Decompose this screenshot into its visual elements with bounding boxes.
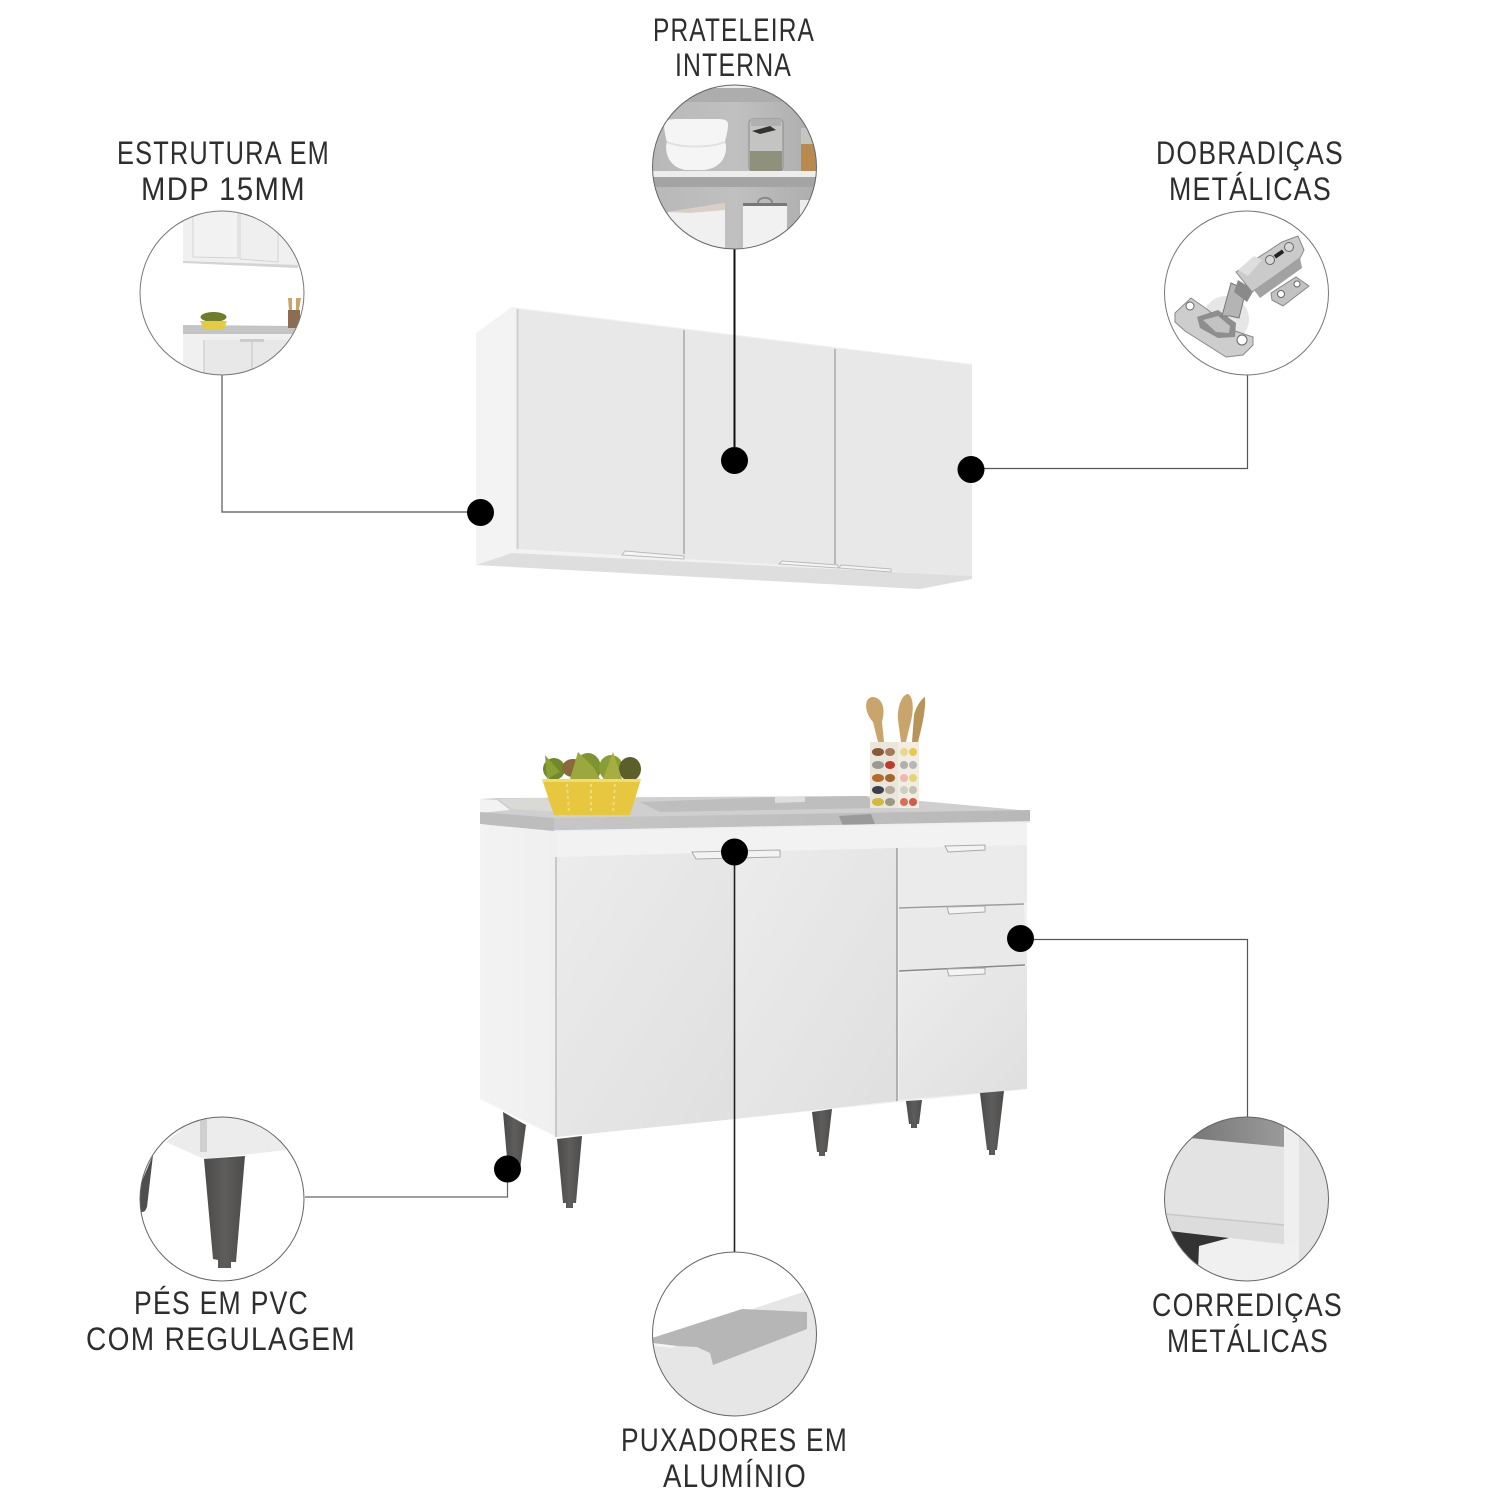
callout: corredicas metalicas (1164, 1116, 1329, 1282)
second jar (801, 128, 812, 144)
connector: puxadores (734, 852, 736, 1252)
label: prateleira interna: INTERNA (675, 47, 792, 83)
label: corredicas metalicas (1152, 1287, 1343, 1359)
callout: pes em PVC (139, 1116, 305, 1281)
door and drawer handles (692, 845, 985, 976)
arm (1222, 283, 1246, 318)
label: prateleira interna: PRATELEIRA (653, 12, 815, 48)
legs (503, 1091, 1004, 1208)
label: dobradicas metalicas: DOBRADIÇAS (1156, 135, 1344, 171)
marker dots (467, 447, 1034, 1182)
label: estrutura em MDP 15mm: MDP 15MM (141, 171, 306, 207)
base cabinet (480, 796, 1030, 1208)
wall cabinet (476, 307, 972, 589)
label: prateleira interna (653, 12, 815, 83)
label: puxadores em aluminio: PUXADORES EM (621, 1422, 848, 1458)
countertop (480, 796, 1030, 831)
connector: estrutura (222, 375, 480, 512)
callout: prateleira interna (652, 85, 821, 250)
wooden spoons (866, 694, 925, 742)
fruit bowl (542, 752, 641, 815)
shelf (652, 171, 817, 177)
cup leaf pattern (872, 748, 917, 806)
utensil holder (866, 694, 925, 808)
cabinet side shading (480, 825, 557, 1137)
cabinet handles (622, 551, 891, 572)
label: puxadores em aluminio (621, 1422, 848, 1494)
callout: estrutura em MDP (139, 205, 305, 380)
side bracket (1271, 277, 1309, 306)
base doors (556, 848, 897, 1137)
label: estrutura em MDP 15mm (117, 135, 330, 207)
label: pes em PVC com regulagem: COM REGULAGEM (86, 1321, 356, 1357)
connector: prateleira (734, 249, 736, 460)
door gaps (518, 309, 835, 564)
label: dobradicas metalicas: METÁLICAS (1169, 171, 1332, 207)
label: corredicas metalicas: METÁLICAS (1167, 1323, 1329, 1359)
callout: puxadores em aluminio (650, 1252, 820, 1420)
connector: dobradicas (971, 375, 1248, 468)
mount plate (1175, 298, 1253, 357)
connector: corredicas (1020, 940, 1248, 1117)
label: puxadores em aluminio: ALUMÍNIO (663, 1458, 807, 1494)
drawers (899, 845, 1027, 1100)
label: corredicas metalicas: CORREDIÇAS (1152, 1287, 1343, 1323)
connector: pes (305, 1169, 508, 1197)
label: dobradicas metalicas (1156, 135, 1344, 207)
jar (749, 119, 783, 171)
bowls (664, 119, 728, 170)
white boxes (668, 203, 725, 250)
label: pes em PVC com regulagem (86, 1285, 356, 1357)
cabinet doors (518, 309, 972, 576)
cabinet underside (476, 553, 972, 589)
callout: dobradicas metalicas (1164, 211, 1329, 375)
label: estrutura em MDP 15mm: ESTRUTURA EM (117, 135, 330, 171)
hinge body (1236, 236, 1304, 292)
label: pes em PVC com regulagem: PÉS EM PVC (134, 1285, 309, 1321)
